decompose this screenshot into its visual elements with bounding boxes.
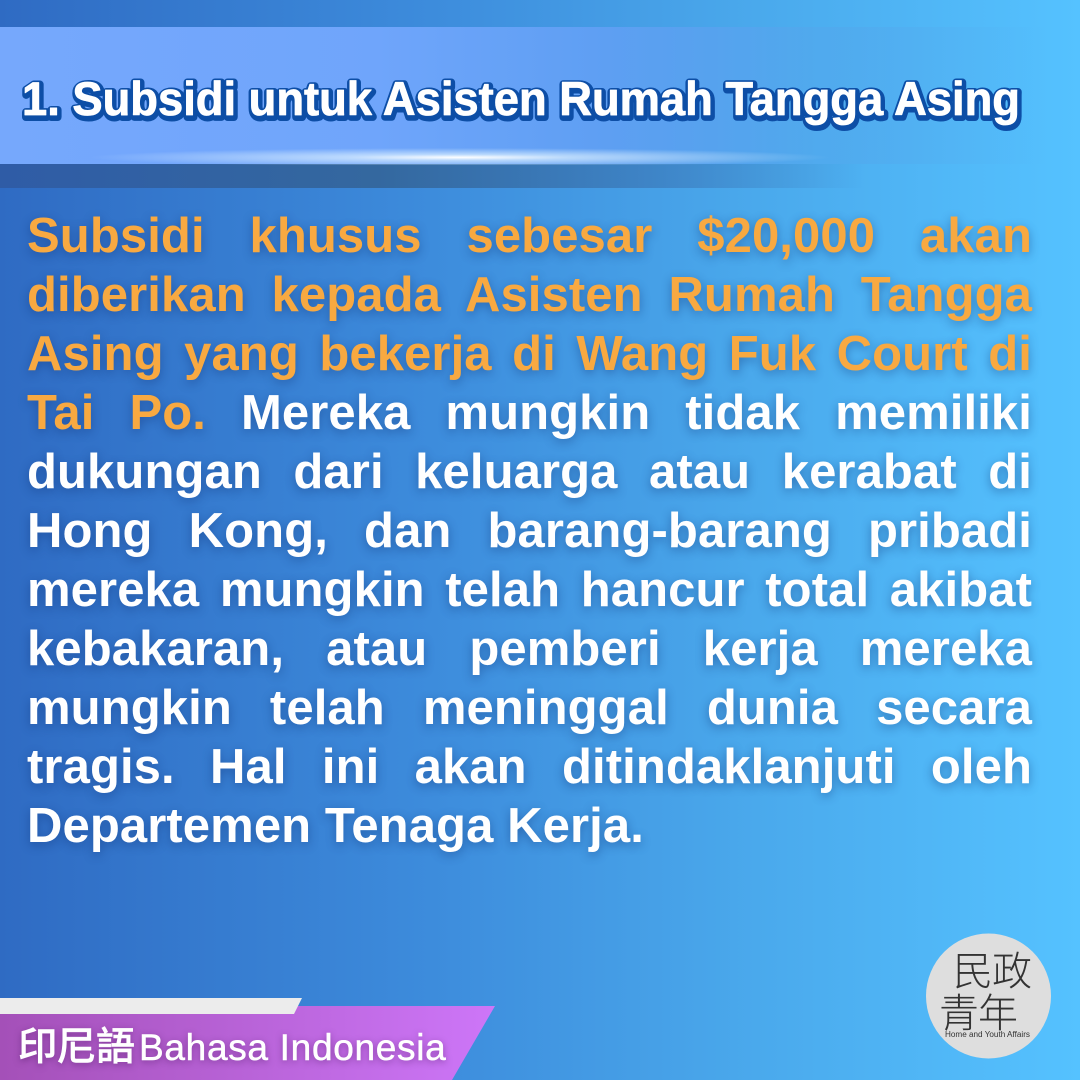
- body paragraph: Departemen Tenaga Kerja.: [27, 799, 644, 853]
- body paragraph: mungkin telah meninggal dunia secara: [27, 681, 1032, 735]
- language tag: [0, 998, 495, 1080]
- title banner: [0, 27, 821, 188]
- tag label: 印尼語Bahasa Indonesia: [18, 1026, 446, 1069]
- banner light streak: [90, 146, 830, 165]
- title: 1. Subsidi untuk Asisten Rumah Tangga Asing: [23, 74, 1021, 127]
- logo: 民: [953, 939, 993, 997]
- logo: 青: [939, 981, 979, 1039]
- body paragraph: [26, 209, 1036, 858]
- body paragraph: dukungan dari keluarga atau kerabat di: [27, 445, 1032, 499]
- body paragraph: kebakaran, atau pemberi kerja mereka: [27, 622, 1032, 676]
- body paragraph: Subsidi khusus sebesar $20,000 akan: [27, 209, 1032, 263]
- body paragraph: tragis. Hal ini akan ditindaklanjuti oleh: [27, 740, 1032, 794]
- logo: Home and Youth Affairs: [945, 1030, 1030, 1039]
- banner band: [0, 27, 1080, 164]
- body paragraph: Tai Po. Mereka mungkin tidak memiliki: [27, 386, 1032, 440]
- tag shape: [0, 998, 495, 1080]
- title: 1. Subsidi untuk Asisten Rumah Tangga Asing: [22, 72, 1020, 125]
- body paragraph: mereka mungkin telah hancur total akibat: [27, 563, 1032, 617]
- logo: 政: [992, 939, 1032, 997]
- banner shadow: [0, 164, 1080, 188]
- body paragraph: Asing yang bekerja di Wang Fuk Court di: [27, 327, 1032, 381]
- logo: 年: [978, 981, 1018, 1039]
- body paragraph: Hong Kong, dan barang-barang pribadi: [27, 504, 1032, 558]
- logo: [926, 934, 1051, 1058]
- body paragraph: diberikan kepada Asisten Rumah Tangga: [27, 268, 1032, 322]
